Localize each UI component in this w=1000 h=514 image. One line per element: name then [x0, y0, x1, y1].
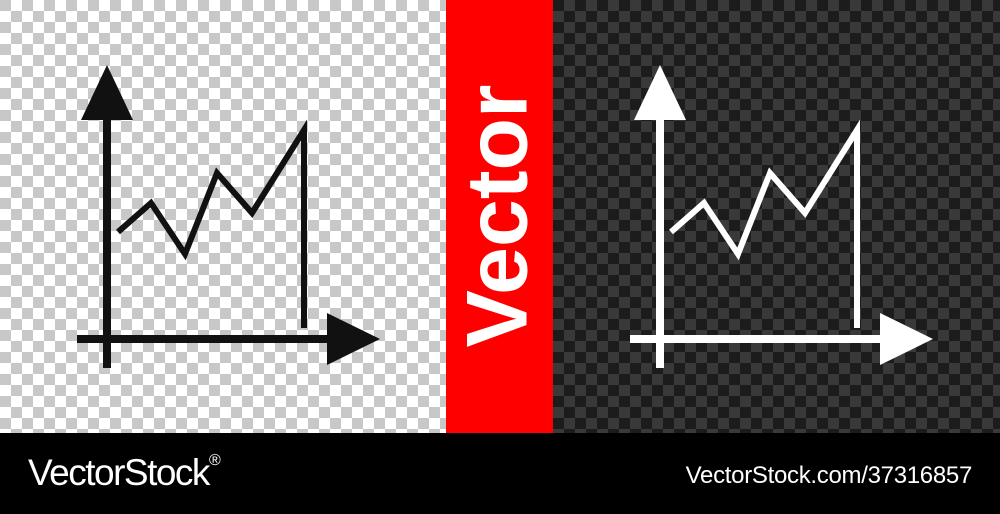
footer bar [0, 433, 1000, 514]
panel: dark checker background [553, 0, 1000, 433]
panel: red vector band [446, 0, 553, 433]
icon: black line chart [77, 65, 380, 368]
panel: light checker background [0, 0, 446, 433]
text: logo: VectorStock® [28, 452, 219, 493]
text: image id: VectorStock.com/37316857 [686, 462, 972, 489]
text: Vector: Vector [450, 85, 546, 347]
icon: white line chart [630, 65, 933, 368]
